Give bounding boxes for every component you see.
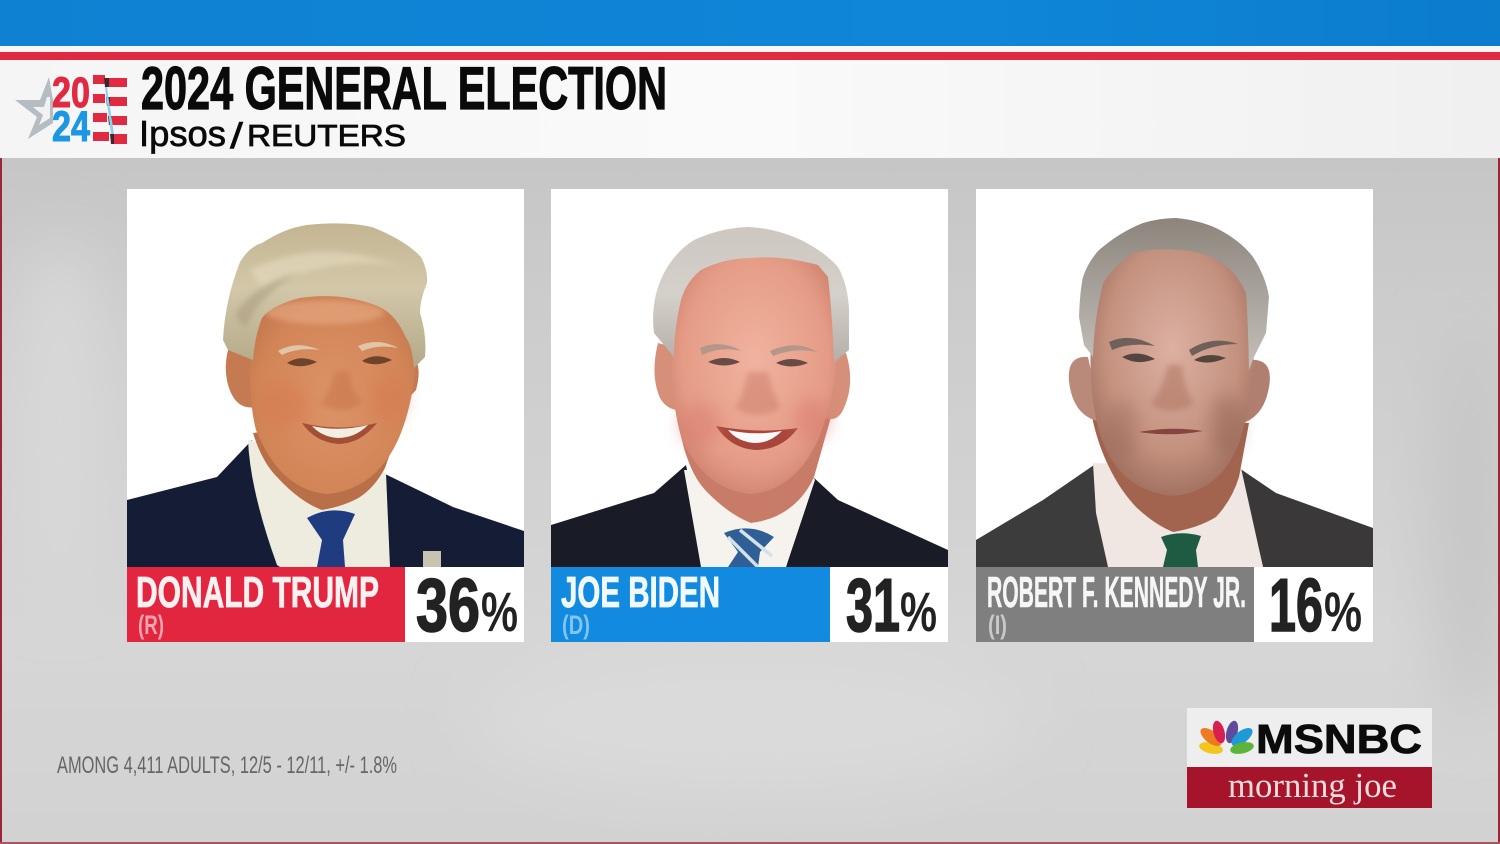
top blue band [0, 0, 1500, 46]
icon: 2024 election logo: 24 [52, 103, 90, 151]
title: 2024 GENERAL ELECTION [141, 55, 667, 122]
percentage: 16 [1269, 563, 1323, 647]
panel: Robert F. Kennedy Jr. [976, 189, 1373, 647]
panel: Joe Biden [551, 189, 948, 647]
party label: (I) [988, 610, 1007, 640]
percentage: 31 [846, 563, 900, 647]
icon: 2024 election logo [15, 69, 127, 151]
subtitle: pollster: / [230, 115, 243, 156]
party label: (D) [562, 610, 590, 640]
logo: MSNBC morning joe [1187, 708, 1432, 808]
subtitle: pollster: REUTERS [247, 118, 406, 153]
name bar [551, 567, 830, 642]
header panel [0, 46, 1500, 158]
name bar [127, 567, 405, 642]
portrait: Donald Trump [127, 223, 524, 567]
percentage: % [481, 580, 518, 643]
name bar [976, 567, 1254, 642]
footnote: poll sample: AMONG 4,411 ADULTS, 12/5 - 12/11, +/- 1.8% [57, 752, 397, 779]
morning joe wordmark: morning joe [1228, 766, 1397, 805]
percentage: % [900, 580, 937, 643]
subtitle: pollster: Ipsos [139, 113, 226, 154]
candidate name: DONALD TRUMP [136, 568, 379, 617]
party label: (R) [138, 610, 164, 640]
candidate name: JOE BIDEN [561, 568, 720, 617]
panel: Donald Trump [127, 189, 524, 647]
portrait: Robert F. Kennedy Jr. [976, 218, 1373, 567]
MSNBC wordmark: MSNBC [1256, 716, 1422, 762]
icon: 2024 election logo: 20 [52, 69, 90, 117]
percentage: % [1324, 580, 1362, 643]
portrait: Joe Biden [551, 227, 948, 567]
icon: peacock [1197, 719, 1256, 756]
percentage: 36 [416, 563, 480, 647]
subtitle: pollster [139, 113, 406, 156]
